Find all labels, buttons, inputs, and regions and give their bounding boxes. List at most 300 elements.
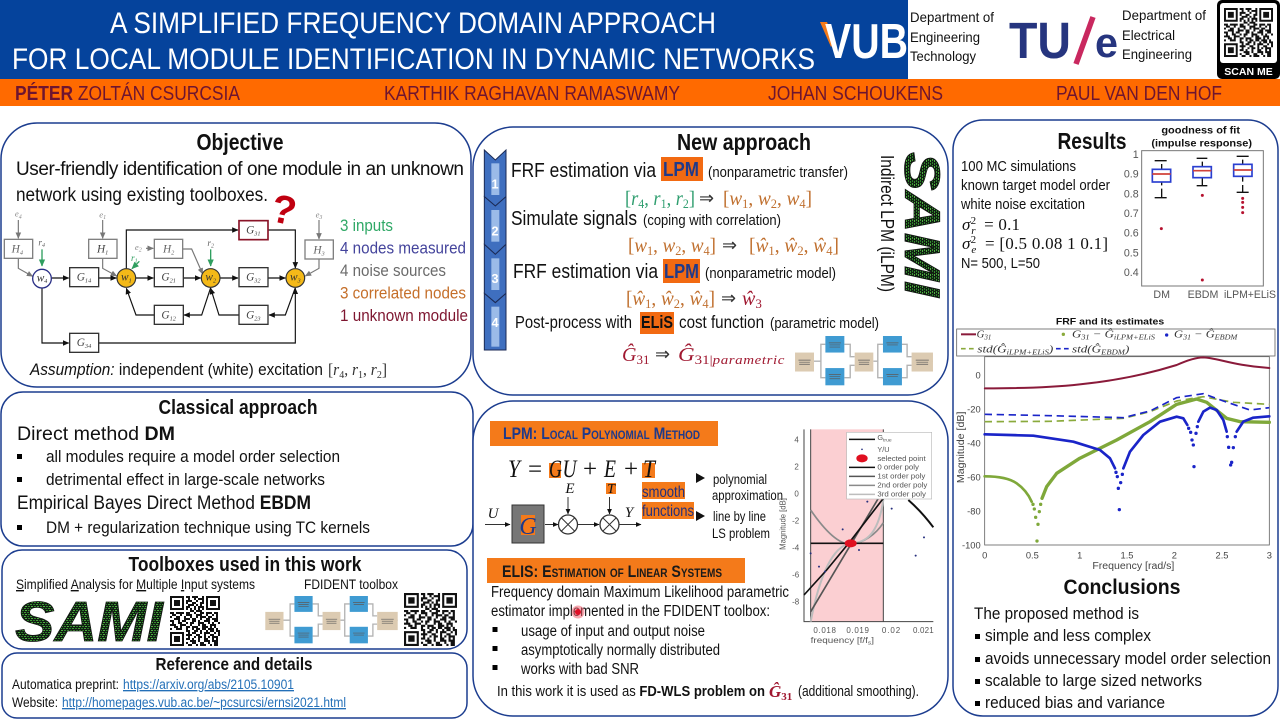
block diagram: T — [607, 482, 616, 497]
direct method: all modules require a model order selection — [46, 447, 340, 466]
line chart: FRF and its estimates: -40 — [967, 438, 981, 448]
LPM polynomial chart: -2 — [792, 517, 800, 526]
simulation settings — [960, 158, 1110, 272]
LPM polynomial chart: Magnitude [dB] — [779, 498, 788, 550]
step 2: (coping with correlation) — [643, 213, 781, 229]
simulation settings: e — [971, 244, 976, 256]
step 4: cost function — [679, 312, 764, 332]
step 3: ⇒ — [721, 288, 736, 308]
box plot: goodness of fit: 1 — [1133, 149, 1139, 161]
assumption: , — [363, 360, 371, 379]
network diagram: w — [37, 272, 44, 284]
network diagram: H — [97, 244, 105, 256]
step 1: 4 — [799, 196, 806, 211]
department: engineering technology — [910, 9, 994, 64]
network diagram: G — [161, 272, 170, 284]
LPM polynomial chart: 0.021 — [913, 626, 934, 635]
box plot: goodness of fit: EBDM — [1188, 289, 1218, 301]
heading: objective: Objective — [196, 129, 284, 155]
network diagram: 21 — [170, 278, 176, 285]
author bar: PÉTER ZOLTÁN CSURCSIA — [15, 82, 241, 105]
simulation settings: = 0.1 — [980, 215, 1020, 234]
network diagram: G — [246, 224, 254, 236]
assumption: [r — [328, 360, 340, 379]
network diagram: 12 — [170, 315, 177, 322]
simulation settings: N= 500, L=50 — [961, 255, 1040, 272]
assumption: 4 — [339, 369, 345, 381]
step 3: FRF estimation via — [513, 261, 659, 283]
simulation settings: = [0.5 0.08 1 0.1] — [981, 234, 1108, 253]
step 1: 2 — [683, 196, 689, 211]
step 1: 1 — [661, 196, 667, 211]
network diagram: 1 — [105, 250, 108, 257]
step 3: 1 — [645, 296, 651, 311]
box plot: goodness of fit: 0.8 — [1124, 188, 1139, 200]
step 2: 1 — [647, 243, 653, 258]
chart legend: − Ĝ — [1090, 329, 1114, 341]
network diagram: G — [77, 272, 85, 284]
chart legend: G — [977, 330, 984, 341]
panel: reference and details — [2, 653, 467, 718]
step 1: 2 — [771, 196, 777, 211]
line chart: FRF and its estimates: 0 — [975, 370, 981, 380]
department: engineering technology: Engineering — [910, 29, 980, 45]
assumption: ] — [382, 360, 387, 379]
step 2: 1 — [768, 243, 775, 258]
network diagram: 2 — [171, 250, 175, 257]
assumption: , — [344, 360, 352, 379]
step 2: [w — [628, 235, 648, 257]
LPM equation: T — [643, 456, 657, 483]
line chart: FRF and its estimates: -20 — [967, 404, 981, 414]
website link: http://homepages.vub.ac.be/~pcsurcsi/ernsi2021.html — [62, 695, 346, 710]
LPM equation: E — [603, 456, 616, 483]
step 1: r — [676, 188, 683, 210]
step 2: w — [691, 235, 704, 257]
polynomial approximation notes: polynomial — [713, 472, 767, 487]
department: electrical engineering: Department of — [1122, 7, 1206, 23]
legend: network counts: 1 unknown module — [340, 306, 468, 325]
network diagram: e — [99, 209, 103, 219]
simulation settings: known target model order — [961, 177, 1110, 194]
network diagram: H — [12, 244, 20, 256]
box plot: goodness of fit: (impulse response) — [1151, 139, 1252, 150]
conclusions list: simple and less complex — [985, 626, 1151, 645]
simulation settings: σ — [962, 234, 971, 253]
smooth functions tags: functions — [642, 503, 694, 520]
department: electrical engineering — [1122, 7, 1206, 62]
network diagram: w — [290, 272, 298, 284]
step 4: (parametric model) — [770, 316, 879, 332]
author bar — [0, 79, 1280, 106]
step 1: LPM — [663, 159, 699, 181]
ELiS description — [491, 584, 789, 678]
department: electrical engineering: Engineering — [1122, 46, 1192, 62]
network diagram: 1 — [129, 278, 132, 284]
step chevrons: 1 — [491, 177, 499, 191]
step 3: (nonparametric model) — [705, 266, 836, 282]
QR code: FDIDENT — [404, 593, 457, 646]
step 4 — [515, 312, 879, 367]
step chevrons: 4 — [491, 316, 499, 330]
step 2: w — [663, 235, 676, 257]
direct method — [17, 424, 340, 489]
step 2: , — [804, 235, 813, 257]
step 2: 4 — [704, 243, 710, 258]
network diagram: G — [77, 337, 85, 349]
direct method: Direct method DM — [17, 424, 175, 445]
network diagram: 23 — [254, 315, 261, 322]
LPM polynomial chart: frequency [f/f — [811, 636, 857, 645]
ELiS banner: ELIS: Estimation of Linear Systems — [502, 562, 722, 581]
panel: classical approach — [1, 392, 473, 546]
step 2: ŵ — [784, 235, 798, 257]
line chart: FRF and its estimates — [956, 316, 1275, 572]
box plot: goodness of fit: 0.7 — [1124, 208, 1139, 220]
assumption: 1 — [358, 369, 363, 381]
network diagram: H — [163, 244, 171, 256]
ELiS description: asymptotically normally distributed — [521, 642, 720, 659]
department: engineering technology: Department of — [910, 9, 994, 25]
panel: objective — [1, 123, 471, 387]
legend: network counts: 3 correlated nodes — [340, 284, 466, 302]
line chart: FRF and its estimates: -100 — [962, 540, 981, 550]
label: indirect LPM: Indirect LPM (iLPM) — [877, 155, 897, 292]
chart legend: ) — [1124, 344, 1130, 355]
chart legend: iLPM+ELiS — [1114, 334, 1156, 342]
step 2: ⇒ — [722, 235, 737, 255]
assumption: Assumption: independent (white) excitation — [29, 361, 323, 379]
legend: network counts — [340, 216, 468, 325]
polynomial approximation notes: approximation — [712, 488, 783, 503]
LPM polynomial chart: 0.02 — [882, 626, 901, 635]
SAMI caption: Simplified Analysis for Multiple Input systems — [16, 576, 255, 592]
network diagram: w — [121, 272, 129, 284]
website link: Website: — [12, 695, 58, 710]
step 4: 31|parametric — [695, 352, 775, 367]
author bar: PAUL VAN DEN HOF — [1056, 83, 1222, 105]
box plot: goodness of fit: 0.6 — [1124, 228, 1139, 240]
network diagram: r — [131, 254, 135, 264]
network diagram: 3 — [318, 215, 322, 221]
step 4: Ĝ — [622, 342, 637, 366]
department: electrical engineering: Electrical — [1122, 27, 1175, 43]
icon: question mark: ? — [267, 186, 300, 234]
step 3: ŵ — [690, 288, 703, 310]
network diagram: 4 — [44, 278, 47, 285]
step 4: ELiS — [641, 312, 673, 332]
step 1: w — [758, 188, 771, 210]
box plot: goodness of fit: 0.9 — [1124, 169, 1139, 181]
LPM polynomial chart: Y/U — [877, 445, 890, 454]
LPM polynomial chart: 0.019 — [846, 626, 870, 635]
chart legend: G — [1174, 330, 1182, 341]
network diagram: e — [316, 209, 319, 219]
chart legend: 31 — [1080, 334, 1090, 342]
network diagram: G — [246, 272, 254, 284]
step 2: ŵ — [813, 235, 827, 257]
line chart: FRF and its estimates: FRF and its estimates — [1056, 316, 1164, 326]
box plot: goodness of fit: 0.4 — [1124, 267, 1139, 279]
step 1: r — [653, 188, 661, 210]
conclusions list: The proposed method is — [974, 604, 1139, 623]
step chevrons: 3 — [491, 272, 499, 286]
network diagram: 1 — [135, 259, 138, 265]
line chart: FRF and its estimates: -60 — [967, 472, 981, 482]
objective text: network using existing toolboxes. — [16, 185, 268, 206]
conclusions list: reduced bias and variance — [985, 693, 1165, 712]
LPM equation: Y — [508, 456, 523, 483]
step 2: [ŵ — [749, 235, 769, 257]
network diagram: 3 — [321, 250, 325, 257]
chart legend: std(Ĝ — [1072, 344, 1096, 355]
usage note: (additional smoothing). — [798, 684, 919, 700]
logo: TU/e: TU — [1009, 12, 1071, 69]
usage note: In this work it is used as FD-WLS problem on — [497, 684, 765, 700]
network diagram: G — [161, 309, 170, 321]
LPM equation: + — [624, 456, 638, 483]
LPM polynomial chart: 0 order poly — [877, 463, 919, 472]
step 3: LPM — [664, 261, 699, 283]
step 4: Ĝ — [678, 342, 695, 366]
block diagram: E — [564, 481, 575, 497]
chart legend: EBDM — [1100, 348, 1126, 356]
chart legend: 31 — [983, 334, 991, 342]
step chevrons — [484, 150, 506, 350]
network diagram: 2 — [213, 278, 216, 284]
block diagram: U — [488, 506, 500, 522]
title — [12, 7, 815, 76]
LPM banner: LPM: Local Polynomial Method — [503, 424, 700, 443]
step 1: ] — [689, 188, 695, 210]
chart legend: − Ĝ — [1191, 329, 1215, 341]
LPM polynomial chart: s — [868, 641, 872, 647]
LPM polynomial chart: 2 — [794, 463, 799, 472]
step 3: , — [651, 288, 661, 310]
author bar: KARTHIK RAGHAVAN RAMASWAMY — [384, 83, 680, 105]
title: A SIMPLIFIED FREQUENCY DOMAIN APPROACH — [110, 7, 716, 40]
chart legend: G — [1072, 330, 1080, 341]
network diagram: 2 — [139, 248, 142, 254]
network diagram: 4 — [19, 213, 22, 220]
network diagram: 32 — [253, 278, 261, 285]
LPM polynomial chart — [779, 429, 934, 647]
department: engineering technology: Technology — [910, 48, 976, 64]
line chart: FRF and its estimates: Frequency [rad/s] — [1092, 561, 1175, 572]
network diagram: e — [135, 242, 139, 252]
LPM polynomial chart: 0.018 — [813, 626, 837, 635]
line chart: FRF and its estimates: 2.5 — [1216, 550, 1228, 560]
LPM equation: G — [549, 456, 562, 483]
ELiS description: estimator implemented in the FDIDENT toolbox: — [491, 603, 770, 620]
network diagram: 4 — [42, 242, 45, 249]
logo: TU/e: e — [1095, 19, 1118, 66]
step 1: w — [787, 188, 800, 210]
step 1 — [511, 157, 848, 211]
LPM polynomial chart: -8 — [792, 597, 800, 606]
block diagram: G — [519, 514, 537, 540]
usage note: Ĝ — [769, 682, 782, 701]
step 2: ] — [710, 235, 716, 257]
LPM polynomial chart: 3rd order poly — [877, 489, 926, 498]
polynomial approximation notes — [696, 472, 783, 541]
chart legend: 31 — [1182, 334, 1191, 342]
title: FOR LOCAL MODULE IDENTIFICATION IN DYNAMIC NETWORKS — [12, 43, 815, 76]
simulation settings: r — [971, 225, 976, 237]
network diagram: w — [205, 272, 213, 284]
step 3: 4 — [702, 296, 709, 311]
usage note: 31 — [781, 691, 792, 703]
line chart: FRF and its estimates: -80 — [967, 506, 981, 516]
panel: results — [953, 120, 1278, 716]
step 4: ⇒ — [655, 344, 670, 364]
heading: reference: Reference and details — [156, 654, 313, 674]
empirical bayes direct method: Empirical Bayes Direct Method EBDM — [17, 493, 311, 514]
LPM equation: U — [562, 456, 578, 483]
logo: SAMI vertical: SAMI — [894, 152, 950, 298]
LPM polynomial chart: 1st order poly — [877, 472, 926, 481]
logo: TU/e — [1009, 12, 1118, 69]
step 1: FRF estimation via — [511, 160, 657, 182]
ELiS description: works with bad SNR — [520, 661, 639, 678]
chart legend: EBDM — [1214, 334, 1239, 342]
step 1: [r — [625, 188, 639, 210]
block diagram: Y — [625, 505, 635, 521]
LPM polynomial chart: -6 — [792, 570, 800, 579]
network diagram: 4 — [20, 250, 24, 257]
step 1: ] — [806, 188, 812, 210]
LPM equation — [508, 456, 657, 483]
step 1: 1 — [742, 196, 748, 211]
objective text: User-friendly identification of one module in an unknown — [16, 159, 464, 180]
network diagram: 3 — [297, 278, 301, 284]
heading: conclusions: Conclusions — [1064, 576, 1180, 599]
LPM polynomial chart: true — [883, 438, 892, 444]
step 1: , — [667, 188, 676, 210]
chart legend: std(Ĝ — [977, 344, 1001, 355]
step 4: 31 — [636, 352, 649, 367]
step 2: 2 — [797, 243, 804, 258]
step 3: , — [680, 288, 690, 310]
QR code: SAMI — [170, 596, 220, 646]
preprint link: https://arxiv.org/abs/2105.10901 — [123, 677, 294, 692]
line chart: FRF and its estimates: 1.5 — [1121, 550, 1133, 560]
assumption: r — [371, 360, 377, 379]
network diagram — [4, 209, 333, 352]
step 2: 4 — [826, 243, 833, 258]
assumption: r — [352, 360, 358, 379]
LPM polynomial chart: G — [877, 433, 883, 442]
ELiS description: Frequency domain Maximum Likelihood parametric — [491, 584, 789, 601]
FDIDENT flow diagram — [265, 596, 398, 643]
step 3: ] — [709, 288, 715, 310]
smooth functions tags: smooth — [642, 484, 685, 501]
heading: new approach: New approach — [677, 129, 811, 155]
preprint link: Automatica preprint: — [12, 677, 119, 692]
simulation settings: white noise excitation — [960, 196, 1085, 213]
step 2: ] — [833, 235, 839, 257]
LPM banner — [490, 421, 718, 446]
panel: new approach — [473, 127, 950, 395]
preprint link — [12, 677, 294, 692]
QR code: scan me — [1217, 0, 1280, 79]
box plot: goodness of fit: DM — [1153, 289, 1170, 301]
box plot: goodness of fit: goodness of fit — [1161, 125, 1241, 136]
legend: network counts: 4 nodes measured — [340, 238, 466, 258]
line chart: FRF and its estimates: Magnitude [dB] — [956, 411, 967, 483]
FDIDENT caption: FDIDENT toolbox — [304, 576, 398, 592]
step 1: , — [777, 188, 787, 210]
ELiS banner — [487, 558, 745, 583]
step 1: (nonparametric transfer) — [708, 165, 848, 181]
logo: SAMI: SAMI — [15, 590, 164, 654]
step 1: , — [644, 188, 653, 210]
polynomial approximation notes: LS problem — [712, 526, 770, 541]
chart legend: ) — [1048, 344, 1054, 355]
step 2: , — [653, 235, 663, 257]
network diagram: 1 — [103, 215, 106, 221]
smooth functions tags — [642, 482, 694, 520]
LPM polynomial chart: 2nd order poly — [877, 481, 928, 490]
network diagram: e — [15, 209, 19, 219]
author bar: JOHAN SCHOUKENS — [768, 83, 943, 105]
simulation settings: 100 MC simulations — [961, 158, 1076, 175]
network diagram: 2 — [211, 244, 214, 250]
chart legend: iLPM+ELiS — [1007, 348, 1050, 356]
simulation settings: σ — [962, 215, 971, 234]
step 2: 2 — [675, 243, 681, 258]
step chevrons: 2 — [491, 225, 499, 239]
network diagram: 14 — [85, 278, 92, 285]
step 1: , — [748, 188, 758, 210]
box plot: goodness of fit — [1124, 125, 1276, 301]
network diagram: 31 — [253, 230, 261, 237]
usage note — [497, 682, 919, 703]
network diagram: r — [38, 238, 42, 248]
step 3: ŵ — [742, 288, 756, 310]
legend: network counts: 3 inputs — [340, 216, 393, 235]
network diagram: r — [207, 239, 211, 249]
pointer dot — [572, 606, 584, 618]
LPM equation: + — [583, 456, 597, 483]
step 2 — [511, 208, 839, 258]
panel: LPM and ELiS — [473, 401, 948, 716]
polynomial approximation notes: line by line — [713, 509, 766, 524]
step 2: , — [681, 235, 691, 257]
QR code: scan me: SCAN ME — [1224, 66, 1273, 78]
legend: network counts: 4 noise sources — [340, 261, 446, 280]
step 2: Simulate signals — [511, 208, 637, 230]
conclusions list: scalable to large sized networks — [985, 671, 1202, 690]
objective text — [16, 159, 464, 206]
FDIDENT flow diagram small — [795, 336, 933, 385]
box plot: goodness of fit: iLPM+ELiS — [1224, 289, 1276, 301]
network diagram: H — [313, 244, 322, 256]
step 4: Post-process with — [515, 312, 632, 332]
network diagram: 34 — [84, 343, 92, 350]
header title band — [0, 0, 908, 79]
LPM equation: = — [528, 456, 542, 483]
line chart: FRF and its estimates: 0 — [982, 550, 987, 560]
step 3: [ŵ — [626, 288, 646, 310]
line chart: FRF and its estimates: 3 — [1267, 550, 1272, 560]
simulation settings: 2 — [971, 215, 976, 227]
box plot: goodness of fit: 0.5 — [1124, 247, 1139, 259]
network diagram: G — [246, 309, 254, 321]
empirical bayes direct method: DM + regularization technique using TC kernels — [46, 518, 370, 537]
heading: results: Results — [1058, 128, 1126, 154]
step 3: 3 — [755, 296, 762, 311]
